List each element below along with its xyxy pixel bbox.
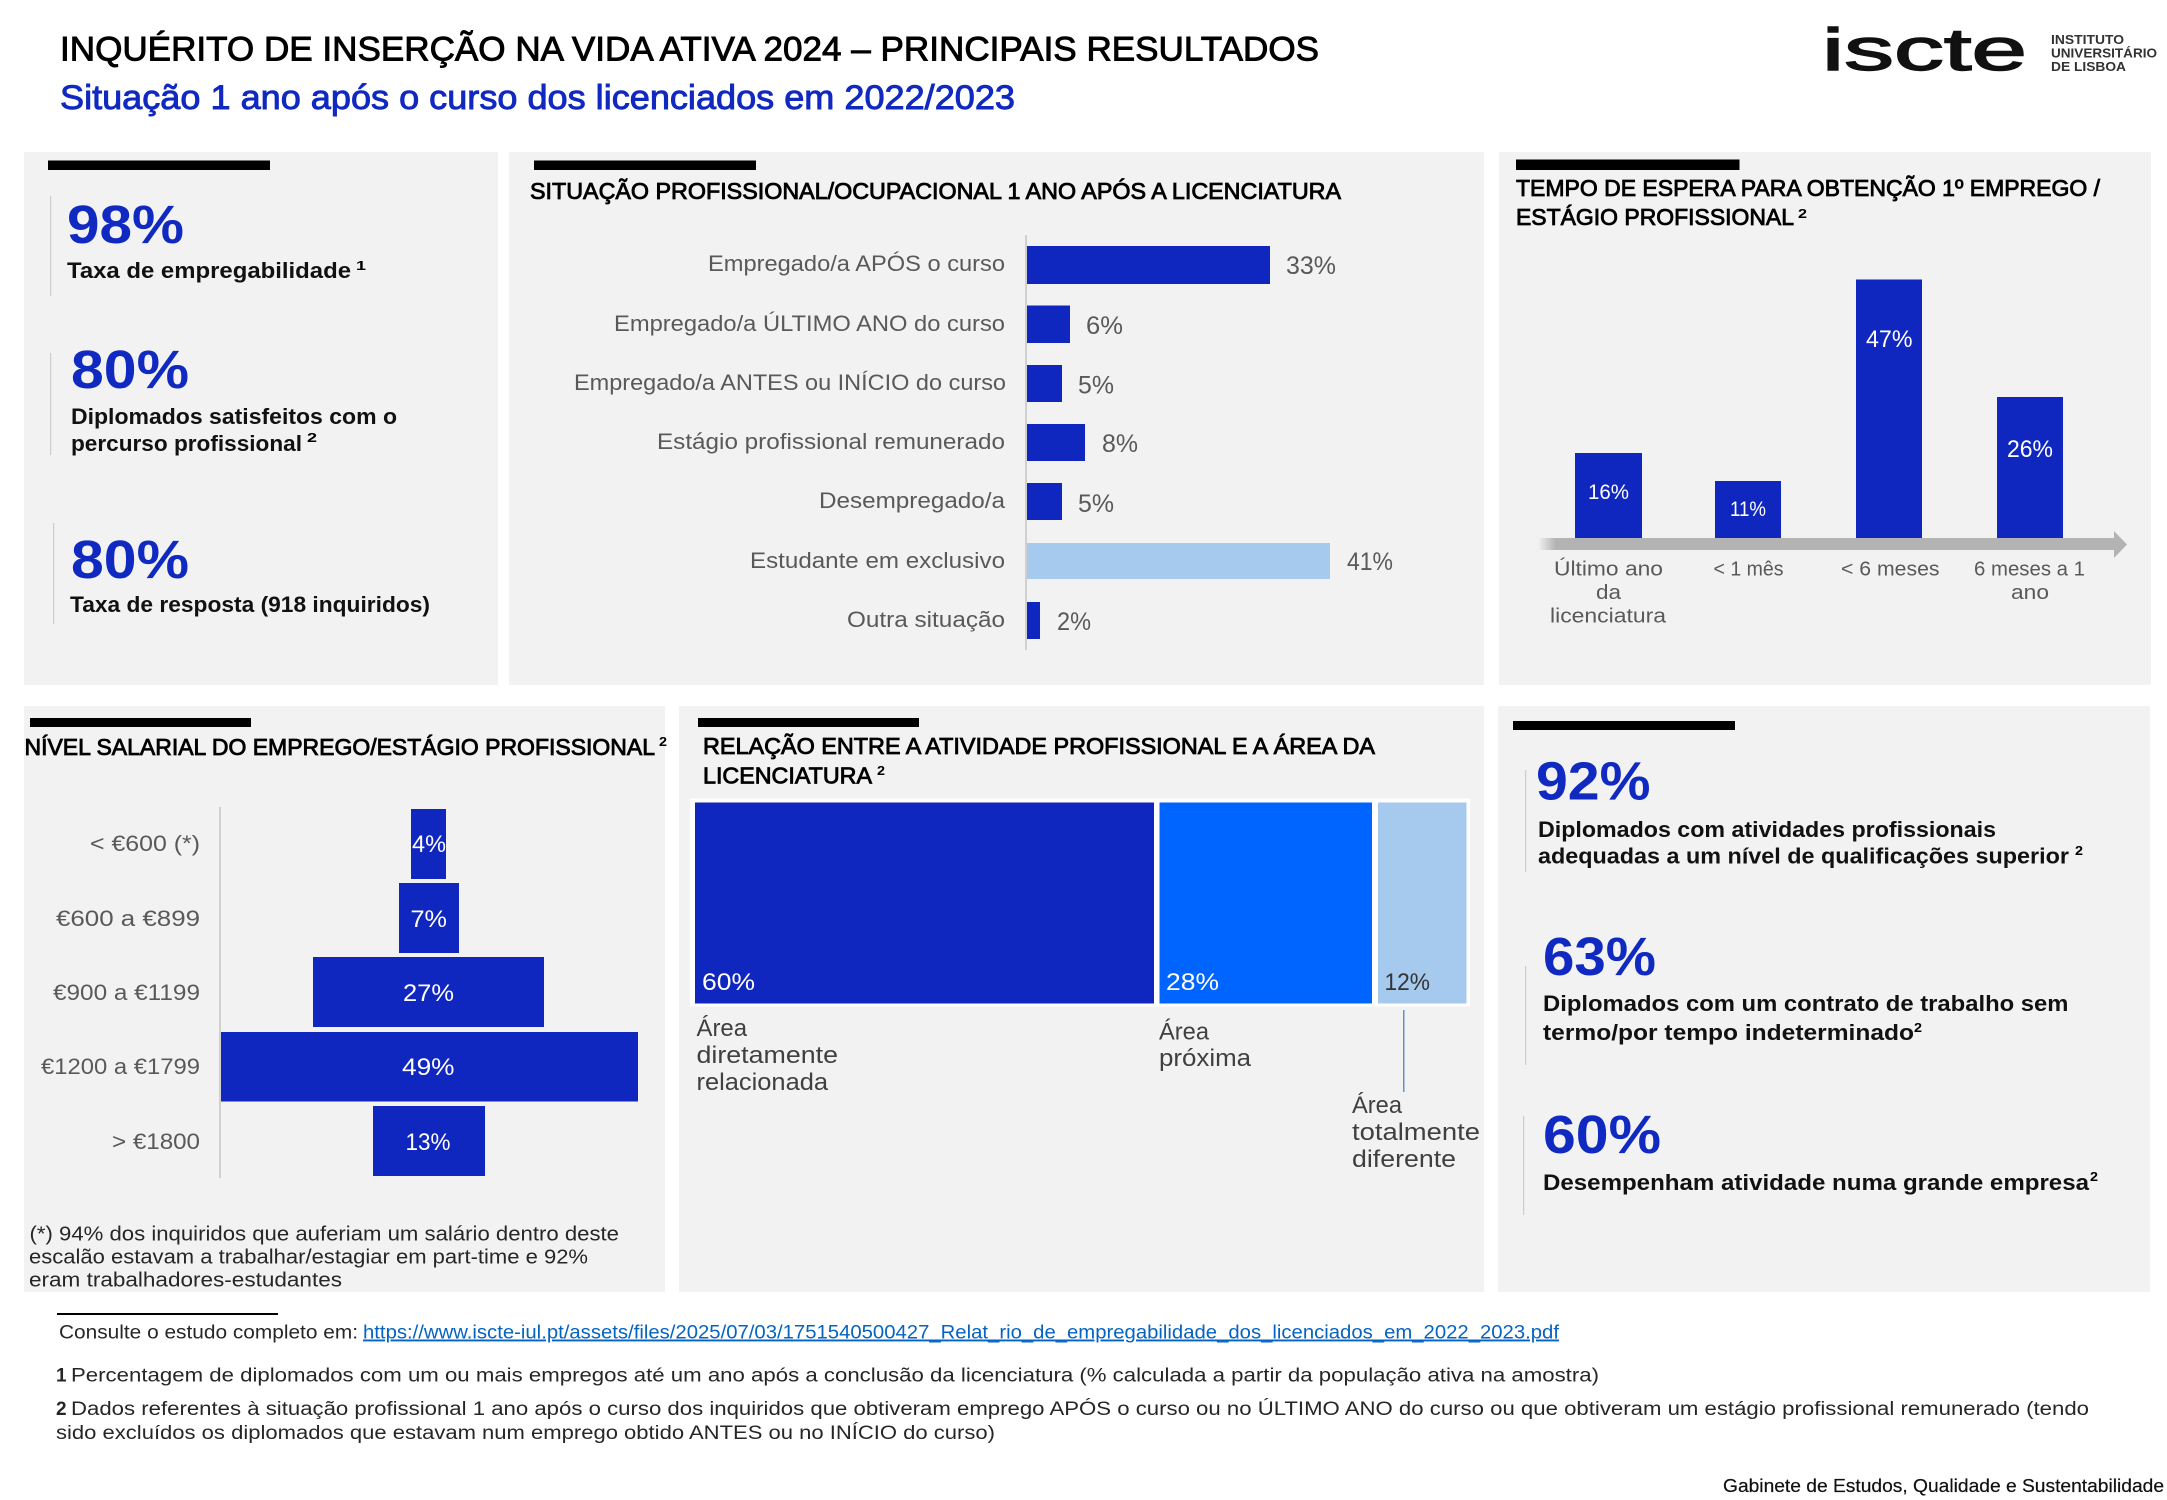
heading [703,733,1376,788]
stat: 80% response rate [53,523,430,624]
pyramid chart: salary: 13% [406,1129,450,1156]
heading: RELAÇÃO ENTRE A ATIVIDADE PROFISSIONAL E A ÁREA DA [703,733,1376,759]
logo: iscte: iscte [1822,17,2027,83]
note 1: 1 [56,1366,67,1386]
panel: salary level [24,706,667,1292]
stat: 80% satisfied: 80% [71,340,189,400]
treemap: field relation: Área [1352,1092,1403,1119]
column chart: waiting time: 47% [1866,326,1912,353]
subtitle: Situação 1 ano após o curso dos licenciados em 2022/2023 [60,79,1015,117]
column chart: waiting time: 16% [1588,481,1629,504]
panel: field relation [679,706,1484,1292]
bar chart: situation: 41% [1347,548,1393,576]
column chart: waiting time [1538,280,2127,628]
heading: NÍVEL SALARIAL DO EMPREGO/ESTÁGIO PROFISSIONAL [24,734,655,760]
stat: 80% satisfied: percurso profissional [71,431,302,456]
footer notes [56,1313,2164,1496]
stat: 92%: adequadas a um nível de qualificações superior [1538,844,2069,868]
bar chart: situation: 6% [1086,312,1123,340]
logo: iscte: DE LISBOA [2051,59,2127,74]
treemap: field relation: 28% [1166,969,1219,996]
pyramid chart: salary: €600 a €899 [56,906,200,931]
pyramid chart: salary: €1200 a €1799 [41,1054,200,1079]
stat: 80% satisfied [50,340,397,456]
bar chart: situation: 33% [1286,252,1336,280]
bar chart: situation: Empregado/a ANTES ou INÍCIO do curso [574,370,1006,395]
bar chart: situation: 8% [1102,430,1138,458]
bar chart: situation [574,235,1393,650]
heading: SITUAÇÃO PROFISSIONAL/OCUPACIONAL 1 ANO APÓS A LICENCIATURA [530,178,1342,204]
pyramid chart: salary [41,807,638,1178]
bar chart: situation: Empregado/a ÚLTIMO ANO do curso [614,311,1005,336]
bar chart: situation: 5% [1078,490,1114,518]
footnote: salary: (*) 94% dos inquiridos que auferiam um salário dentro deste [30,1224,619,1246]
title: INQUÉRITO DE INSERÇÃO NA VIDA ATIVA 2024 – PRINCIPAIS RESULTADOS [60,30,1319,68]
panel: key figures bottom [1498,706,2150,1292]
pyramid chart: salary: > €1800 [112,1129,200,1154]
note 1: Percentagem de diplomados com um ou mais empregos até um ano após a conclusão da licenciatura (% calculada a partir da população ativa na amostra) [71,1366,1599,1386]
stat: 63%: 63% [1543,927,1656,987]
stat: 63%: termo/por tempo indeterminado [1543,1020,1914,1045]
stat: 60% [1523,1105,2098,1215]
column chart: waiting time: < 6 meses [1841,558,1940,580]
heading: 2 [1798,206,1807,221]
treemap: field relation: diretamente [696,1042,838,1069]
column chart: waiting time: 26% [2007,436,2053,463]
heading: 2 [877,763,885,778]
heading: 2 [659,734,667,749]
stat: 80% response rate: Taxa de resposta (918 inquiridos) [70,592,430,617]
note 2: sido excluídos os diplomados que estavam num emprego obtido ANTES ou no INÍCIO do curso) [56,1423,995,1444]
stat: 63%: Diplomados com um contrato de trabalho sem [1543,991,2068,1016]
logo: iscte [1822,17,2157,83]
stat: 92%: 2 [2075,843,2083,858]
treemap: field relation: totalmente [1352,1119,1480,1146]
stat: 92% [1525,752,2083,872]
logo: iscte: UNIVERSITÁRIO [2051,46,2157,60]
pyramid chart: salary: 7% [410,906,447,933]
column chart: waiting time: Último ano [1554,558,1663,580]
stat: 60%: 2 [2090,1169,2098,1184]
bar chart: situation: Empregado/a APÓS o curso [708,251,1005,276]
study link: Consulte o estudo completo em: [59,1322,358,1344]
column chart: waiting time: da [1596,582,1622,604]
column chart: waiting time: < 1 mês [1714,558,1784,580]
treemap: field relation: diferente [1352,1146,1456,1173]
pyramid chart: salary: 27% [403,980,454,1007]
bar chart: situation: Estágio profissional remunerado [657,429,1005,454]
treemap: field relation: Área [696,1015,748,1042]
pyramid chart: salary: 4% [412,831,446,858]
treemap: field relation [690,798,1480,1173]
footnote: salary [29,1224,619,1292]
heading: LICENCIATURA [703,762,873,788]
stat: 80% satisfied: 2 [307,430,317,445]
footnote: salary: escalão estavam a trabalhar/estagiar em part-time e 92% [29,1246,588,1268]
stat: 80% response rate: 80% [71,530,189,590]
column chart: waiting time: 6 meses a 1 [1974,558,2085,580]
bar chart: situation: 2% [1057,608,1091,636]
logo: iscte: INSTITUTO [2051,32,2124,47]
heading: TEMPO DE ESPERA PARA OBTENÇÃO 1º EMPREGO / [1516,175,2101,201]
bar chart: situation: 5% [1078,372,1114,400]
column chart: waiting time: licenciatura [1550,606,1667,628]
column chart: waiting time: ano [2011,582,2049,604]
stat: 63%: 2 [1914,1020,1922,1035]
stat: 98%: Taxa de empregabilidade [67,258,351,283]
panel: professional situation [509,152,1484,685]
treemap: field relation: próxima [1159,1045,1252,1072]
study link: https://www.iscte-iul.pt/assets/files/2025/07/03/1751540500427_Relat_rio_de_empregabilidade_dos_licenciados_em_2022_2023.pdf [363,1322,1560,1344]
stat: 98%: 98% [67,195,184,255]
note 2: Dados referentes à situação profissional 1 ano após o curso dos inquiridos que obtiveram emprego APÓS o curso ou no ÚLTIMO ANO do curso ou que obtiveram um estágio profissional remunerado (tendo [71,1398,2089,1420]
stat: 80% satisfied: Diplomados satisfeitos com o [71,404,397,429]
stat: 92%: 92% [1536,752,1650,812]
note 2: 2 [56,1399,67,1420]
bar chart: situation: Desempregado/a [819,488,1006,513]
panel: key figures top [24,152,498,685]
treemap: field relation: relacionada [696,1069,829,1096]
stat: 63% [1525,927,2068,1065]
heading: ESTÁGIO PROFISSIONAL [1516,204,1794,230]
stat: 60%: Desempenham atividade numa grande empresa [1543,1170,2090,1195]
stat: 60%: 60% [1543,1105,1661,1165]
pyramid chart: salary: 49% [402,1054,454,1081]
stat: 92%: Diplomados com atividades profissionais [1538,817,1996,842]
treemap: field relation: 60% [702,969,755,996]
pyramid chart: salary: < €600 (*) [90,831,200,856]
bar chart: situation: Estudante em exclusivo [750,548,1005,573]
note 2 [56,1398,2089,1444]
footnote: salary: eram trabalhadores-estudantes [29,1270,342,1292]
treemap: field relation: Área [1159,1018,1210,1046]
stat: 98% [50,195,366,296]
credit: Gabinete de Estudos, Qualidade e Sustentabilidade [1723,1476,2164,1496]
pyramid chart: salary: €900 a €1199 [53,980,200,1005]
treemap: field relation: 12% [1384,969,1430,996]
stat: 98%: 1 [356,258,366,273]
panel: waiting time [1499,152,2151,685]
bar chart: situation: Outra situação [847,607,1005,632]
column chart: waiting time: 11% [1730,498,1766,521]
heading [1516,175,2101,230]
arrow: time axis [1538,531,2127,558]
